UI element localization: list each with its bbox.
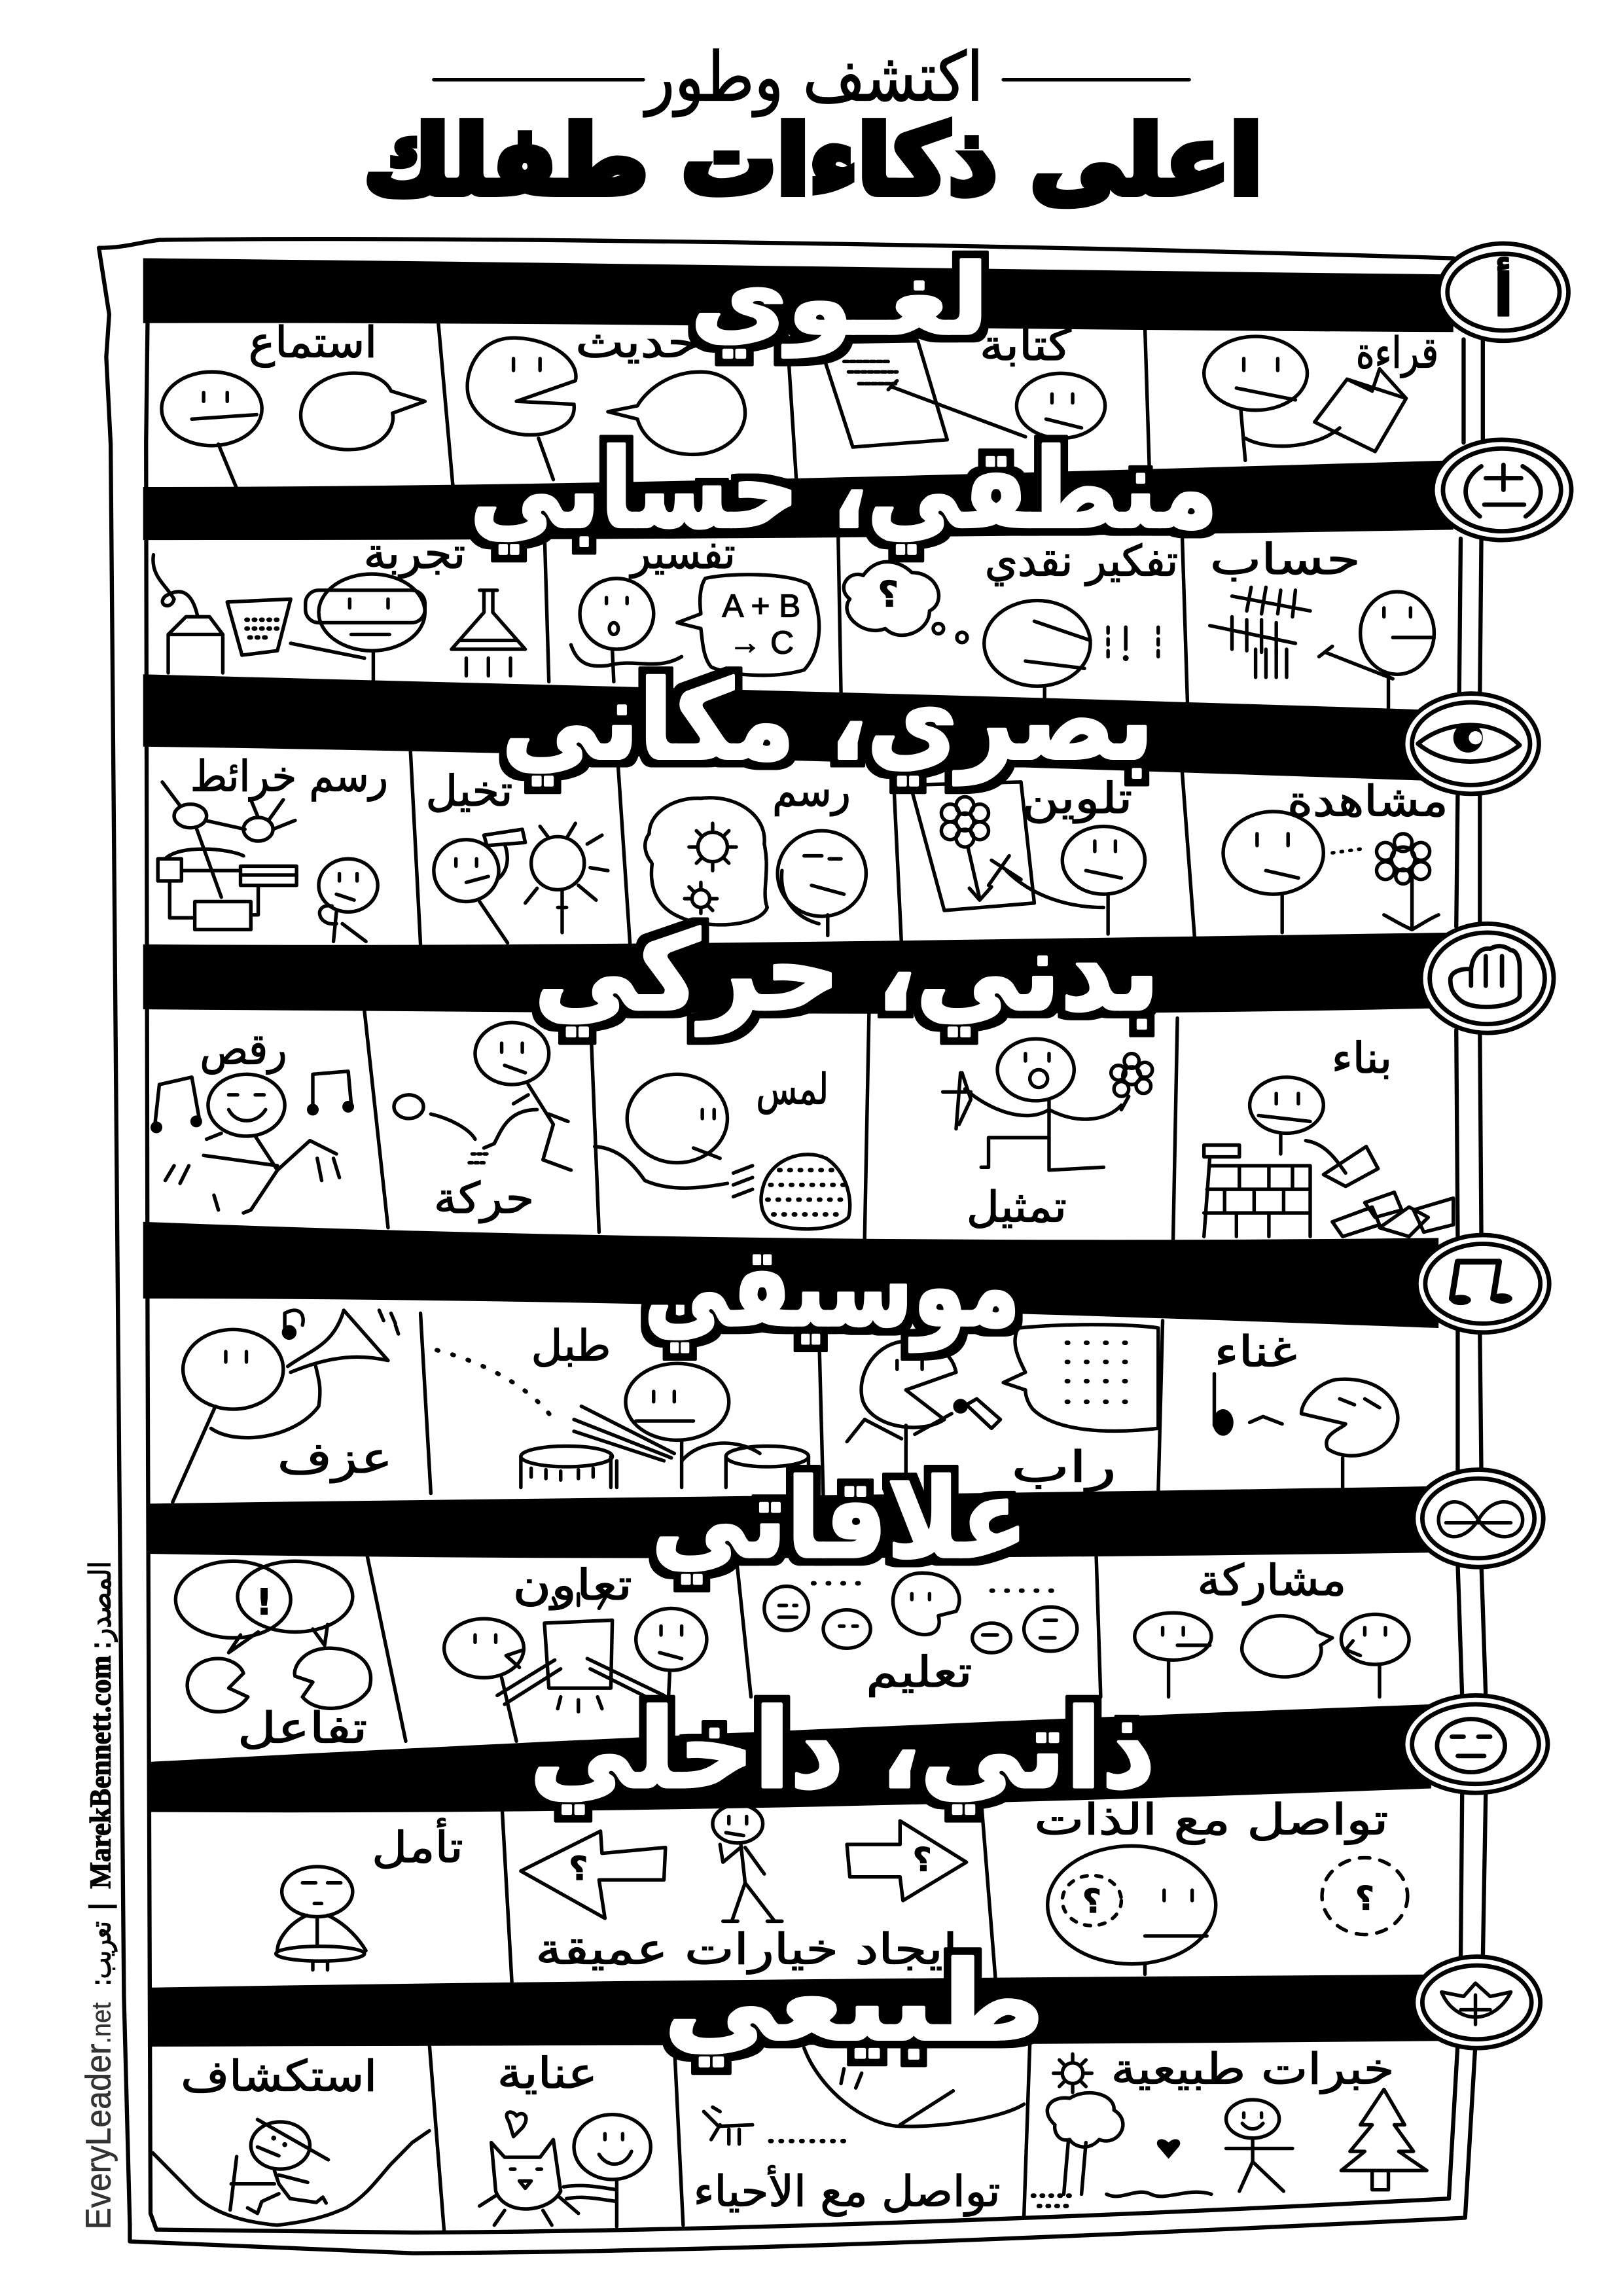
- label: writing: كتابة: [980, 321, 1072, 370]
- credit: rotated source text: EveryLeader: [79, 2043, 118, 2230]
- text: question marks: ؟: [569, 1850, 588, 1888]
- text: self question marks: ؟: [1355, 1879, 1374, 1917]
- text: self question marks: [1082, 1879, 1374, 1920]
- panel row 7: intrapersonal: [276, 1795, 1408, 1984]
- panel: reading: [1204, 336, 1406, 460]
- label: reading: قراءة: [1356, 328, 1438, 378]
- label: mind maps: رسم خرائط: [190, 751, 388, 801]
- label: explain: تفسير: [629, 529, 736, 579]
- label: interacting: تفاعل: [238, 1704, 367, 1753]
- panel: drawing: [645, 798, 866, 935]
- text: A + B C: A + B: [722, 587, 800, 624]
- credit: rotated source text: MarekBennett.com: [84, 1656, 116, 1889]
- panel: self connection: [1048, 1846, 1408, 1975]
- title: subtitle with rules: اكتشف وطور: [643, 38, 984, 117]
- label: drawing: رسم: [772, 766, 851, 816]
- icon: grass dots: [1033, 2196, 1073, 2206]
- label: connecting with living things: تواصل مع الأحياء: [694, 2164, 1001, 2216]
- band: interpersonal: [147, 1486, 1454, 1558]
- label: dancing: رقص: [200, 1024, 287, 1074]
- label: finding choices: ايجاد خيارات عميقة: [535, 1925, 957, 1975]
- label: caring: عناية: [497, 2049, 597, 2098]
- panel: coloring: [910, 782, 1145, 934]
- label: moving: حركة: [434, 1174, 534, 1223]
- icon: heart: [1157, 2139, 1180, 2159]
- panel: dancing: [155, 1071, 351, 1213]
- label: experiment: تجربة: [364, 529, 465, 579]
- panel: teaching: [764, 1573, 1077, 1653]
- label: teaching: تعليم: [866, 1647, 972, 1697]
- icon: eye badge: [1403, 694, 1539, 794]
- label: building: بناء: [1332, 1033, 1392, 1083]
- panel row 4: kinesthetic: [151, 1011, 1454, 1247]
- label: reflecting: تأمل: [372, 1818, 463, 1873]
- panel: singing: [1214, 1374, 1398, 1490]
- label: drumming: طبل: [531, 1321, 611, 1371]
- panel: rap: [847, 1325, 1158, 1480]
- panel: nature experiences: [1047, 2054, 1427, 2197]
- heading: natural: طبيعي: [664, 1939, 1044, 2066]
- label: sharing: مشاركة: [1198, 1556, 1346, 1605]
- text: A + B C: [722, 587, 800, 661]
- panel: drumming: [521, 1363, 808, 1488]
- panel: calculation: [1210, 587, 1434, 708]
- panel row 8: natural: [152, 2043, 1427, 2231]
- panel: sharing: [1135, 1613, 1409, 1697]
- label: cooperating: تعاون: [512, 1560, 632, 1610]
- panel: experiment: [153, 555, 526, 682]
- label: singing: غناء: [1214, 1327, 1297, 1377]
- credit: rotated source text: .net: [86, 2002, 116, 2043]
- panel: observing: [1223, 812, 1438, 933]
- icon: explorer eyes: [271, 2136, 287, 2147]
- panel: critical thinking: [844, 562, 1158, 706]
- panel row 2: logical: [153, 524, 1434, 711]
- panel: explain: [571, 575, 819, 682]
- credit: rotated source text: |: [83, 1903, 116, 1910]
- panel: building: [1204, 1077, 1454, 1236]
- icon: dotted rhythm: [437, 1350, 556, 1424]
- credit: rotated source text: المصدر:: [82, 1561, 117, 1650]
- label: coloring: تلوين: [1022, 774, 1132, 823]
- heading: logical mathematical: منطقي، حسابي: [470, 426, 1218, 554]
- band: spatial: [143, 674, 1424, 781]
- panel: mind maps: [158, 782, 378, 941]
- label: self connection: تواصل مع الذات: [1034, 1795, 1389, 1844]
- text: exclamation: !: [256, 1581, 272, 1623]
- icon: hand badge: [1421, 924, 1554, 1033]
- label: speaking: حديث: [575, 318, 700, 368]
- label: critical thinking: تفكير نقدي: [985, 536, 1178, 586]
- icon: interpersonal badge: [1414, 1469, 1543, 1567]
- heading: interpersonal: علاقاتي: [651, 1456, 1027, 1583]
- panel: cooperating: [444, 1594, 707, 1741]
- panel: reflecting: [276, 1867, 366, 1970]
- panel: caring: [480, 2112, 651, 2227]
- text: question marks: ؟: [913, 1841, 931, 1879]
- panel: listening: [162, 372, 425, 487]
- icon: dancing note heads: [151, 1101, 354, 1133]
- icon: note: [282, 1325, 296, 1340]
- icon: mic head: [953, 1399, 968, 1414]
- title: main heading: اعلى ذكاءات طفلك: [364, 106, 1262, 216]
- credit: rotated source text: [79, 1561, 118, 2230]
- icon: singing note: [1213, 1409, 1234, 1436]
- band: kinesthetic: [143, 933, 1454, 1014]
- icon: intrapersonal badge: [1403, 1695, 1548, 1793]
- panel row 1: linguistic: [162, 318, 1438, 487]
- icon: beaker dots: [247, 620, 280, 637]
- icon: lyric dots: [1067, 1343, 1143, 1402]
- panel row 6: interpersonal: [175, 1556, 1409, 1753]
- panel: imagination: [434, 823, 608, 943]
- heading: musical: موسيقي: [644, 1225, 1020, 1352]
- band: intrapersonal: [151, 1704, 1431, 1812]
- panel: writing: [819, 341, 1105, 469]
- panel: finding choices: [521, 1804, 967, 1921]
- label: observing: مشاهدة: [1287, 777, 1448, 827]
- text: A + B C: → C: [729, 624, 794, 661]
- icon: plus minus badge: [1433, 440, 1571, 540]
- panel: playing: [173, 1310, 399, 1502]
- text: question marks: [569, 1841, 931, 1888]
- heading: bodily kinesthetic: بدني، حركي: [534, 908, 1160, 1036]
- icon: linguistic badge: أ: [1493, 257, 1514, 330]
- icon: teaching dots: [813, 1583, 1058, 1590]
- panel: touching: [595, 1074, 850, 1229]
- credit: rotated source text: تعريب:: [84, 1921, 117, 1986]
- icon: ant trail dots: [770, 2140, 851, 2142]
- label: rap: راب: [1011, 1443, 1116, 1492]
- heading: visual spatial: بصري، مكاني: [502, 658, 1154, 785]
- band: natural: [151, 1975, 1454, 2047]
- panel row 3: spatial: [158, 745, 1448, 944]
- label: listening: استماع: [249, 318, 377, 368]
- text: self question marks: ؟: [1082, 1882, 1101, 1920]
- icon: music note badge: [1416, 1235, 1549, 1333]
- label: imagination: تخيل: [425, 766, 512, 816]
- band: linguistic: [143, 259, 1454, 332]
- label: calculation: حساب: [1210, 535, 1361, 584]
- text: question mark: ؟: [878, 574, 899, 615]
- panel row 5: musical: [173, 1310, 1398, 1502]
- frame: outer hand-drawn border: [99, 239, 1486, 2253]
- band: logical: [143, 460, 1454, 540]
- label: nature experiences: خبرات طبيعية: [1111, 2044, 1395, 2094]
- band: musical: [143, 1222, 1438, 1328]
- icon: leaf badge: [1414, 1956, 1541, 2048]
- panel: acting: [943, 1039, 1152, 1170]
- heading: intrapersonal: ذاتي، داخلي: [529, 1686, 1155, 1814]
- panel: interacting: [175, 1561, 371, 1712]
- panel: moving: [394, 1022, 571, 1170]
- label: playing: عزف: [277, 1433, 393, 1483]
- panel: speaking: [467, 338, 745, 480]
- icon: exclamation dot: [1123, 655, 1129, 661]
- label: acting: تمثيل: [967, 1183, 1067, 1232]
- panel: exploring: [152, 2119, 429, 2225]
- panel: connecting with living things: [704, 2048, 1024, 2144]
- icon: linguistic badge: [1438, 243, 1569, 341]
- label: exploring: استكشاف: [181, 2052, 377, 2102]
- label: touching: لمس: [756, 1064, 829, 1114]
- heading: linguistic: لغـوي: [690, 244, 989, 358]
